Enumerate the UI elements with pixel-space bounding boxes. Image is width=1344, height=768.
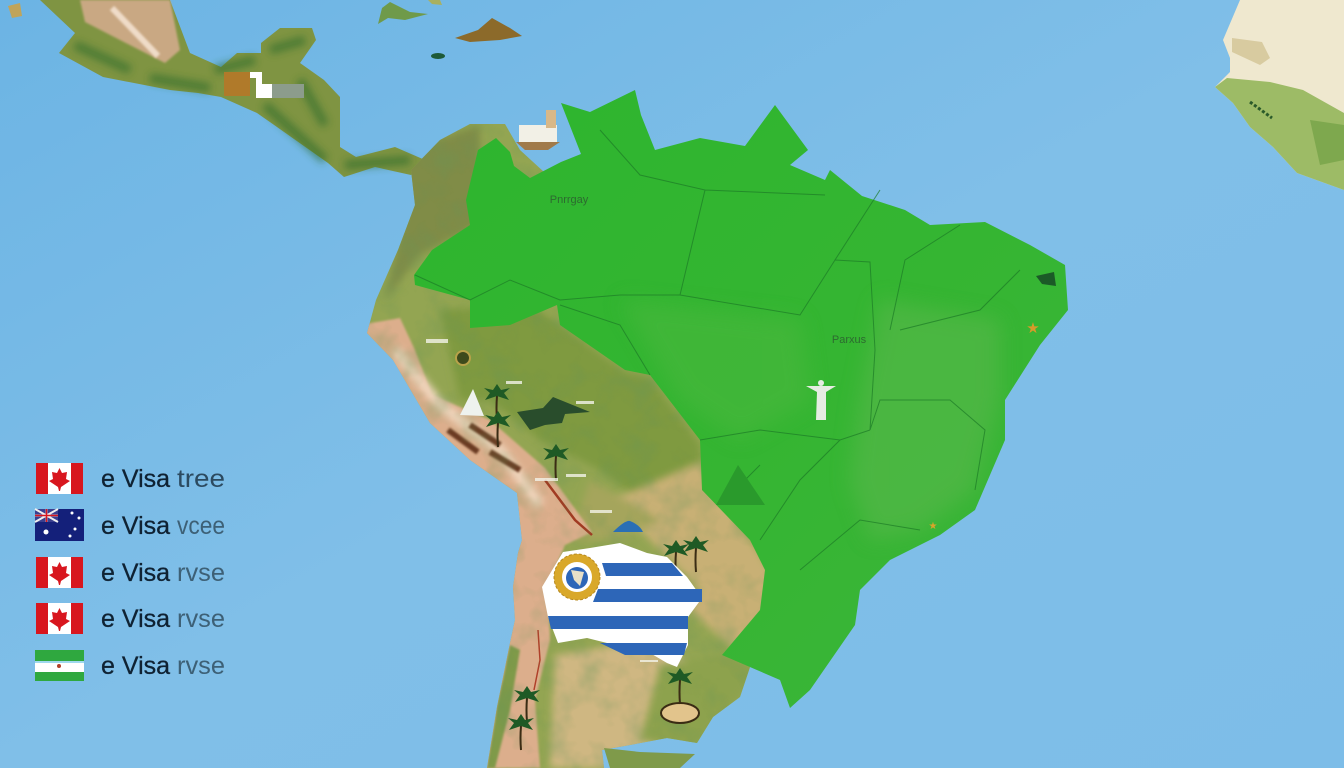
legend row 1 (36, 463, 225, 494)
text: e Visa (101, 465, 170, 493)
map: West Africa coast (1215, 0, 1344, 190)
text: tree (177, 465, 225, 493)
map: Central America (40, 0, 425, 177)
text: vcee (177, 512, 225, 540)
map label: north: Pnrrgay (550, 194, 589, 206)
flag: Australia (35, 509, 84, 541)
map label blobs (426, 339, 658, 662)
icon: small coastal town (516, 110, 560, 150)
icon: palm trees (484, 384, 709, 750)
flag: Canada (36, 463, 83, 494)
flag-shaped region: Uruguay (542, 543, 702, 667)
map: Caribbean islands (8, 0, 522, 59)
region: chaco sand (617, 460, 765, 648)
icon: star northeast: ★ (1026, 320, 1040, 337)
flag: Canada (36, 557, 83, 588)
icon: dark green hill (716, 465, 765, 505)
island strip south of the mainland (604, 748, 695, 768)
icon: ring emblem (456, 351, 470, 365)
region: Amazon lowlands (440, 305, 700, 500)
legend row 2 (35, 509, 225, 541)
map label: centre: Parxus (832, 334, 867, 346)
icon: building on Central America (224, 72, 304, 98)
icon: dark coastal mark (1036, 272, 1056, 286)
map: South America landmass (360, 110, 790, 768)
state borders (415, 130, 1020, 570)
flag: green white green (35, 650, 84, 681)
text: rvse (177, 605, 225, 633)
region: northwest tropics (385, 125, 480, 300)
icon: lake (613, 521, 643, 532)
icon: oval crater (661, 703, 699, 723)
legend row 4 (36, 603, 225, 634)
flag: Canada (36, 603, 83, 634)
region: tropical forest patches (75, 40, 410, 165)
region: Andes (360, 318, 592, 768)
text: e Visa (101, 512, 170, 540)
text: rvse (177, 559, 225, 587)
map: Brazil highlighted in green (414, 90, 1068, 708)
icon: star southeast: ★ (929, 521, 938, 532)
text: e Visa (101, 652, 170, 680)
region: Mexican highlands (80, 0, 180, 63)
icon: sun emblem (554, 554, 600, 600)
icon: white sail landmark (460, 389, 484, 416)
legend: e Visa list (35, 463, 225, 681)
region: lighter eastern Brazil (850, 300, 1000, 540)
text: e Visa (101, 559, 170, 587)
legend row 5 (35, 650, 225, 681)
icon: Christ statue (806, 380, 836, 420)
legend row 3 (36, 557, 225, 588)
texture mottling (368, 160, 759, 768)
text: rvse (177, 652, 225, 680)
text: e Visa (101, 605, 170, 633)
region: coastal green strip (487, 645, 520, 768)
icon: dark green mountain (517, 397, 590, 430)
